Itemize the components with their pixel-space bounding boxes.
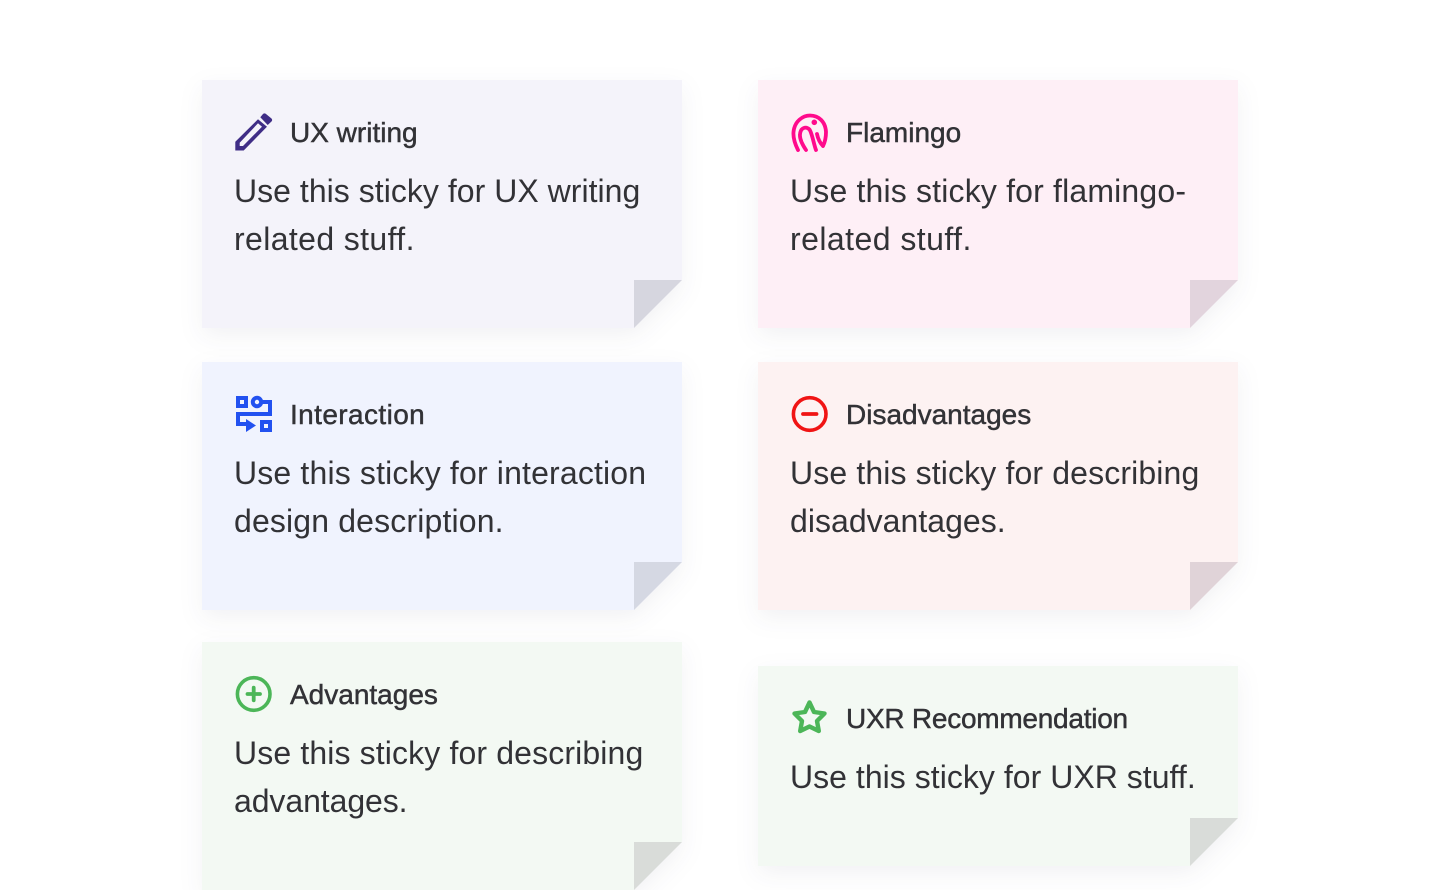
icon: star [792,700,827,734]
sticky: Interaction [202,362,682,614]
body text: Use this sticky for UX writing [234,173,640,209]
body text [234,455,646,539]
corner fold [634,842,682,890]
corner fold [1190,818,1238,866]
corner fold [634,562,682,610]
sticky: Flamingo [758,80,1238,332]
body text: advantages. [234,783,407,819]
body text: Use this sticky for flamingo- [790,173,1186,209]
heading: Disadvantages [846,399,1031,430]
body text: Use this sticky for interaction [234,455,646,491]
body text [790,455,1199,539]
heading: Flamingo [846,117,961,148]
sticky: Disadvantages [758,362,1238,614]
heading: Interaction [290,399,425,430]
body text [790,173,1186,257]
icon: minus circle [792,396,828,432]
body text [234,173,640,257]
heading: Advantages [290,679,438,710]
sticky: Advantages [202,642,682,890]
body text: Use this sticky for describing [790,455,1199,491]
corner fold [1190,280,1238,328]
body text [234,735,643,819]
icon: plus circle [236,676,272,712]
body text: related stuff. [790,221,972,257]
sticky: UX writing [202,80,682,332]
body text: design description. [234,503,504,539]
icon: flamingo [792,114,828,152]
icon: pencil [235,113,272,150]
body text: Use this sticky for describing [234,735,643,771]
body text: disadvantages. [790,503,1006,539]
heading: UXR Recommendation [846,703,1128,734]
corner fold [1190,562,1238,610]
icon: interaction flow [236,396,272,432]
heading: UX writing [290,117,418,148]
body text: Use this sticky for UXR stuff. [790,759,1196,795]
corner fold [634,280,682,328]
sticky: UXR Recommendation [758,666,1238,870]
body text: related stuff. [234,221,415,257]
